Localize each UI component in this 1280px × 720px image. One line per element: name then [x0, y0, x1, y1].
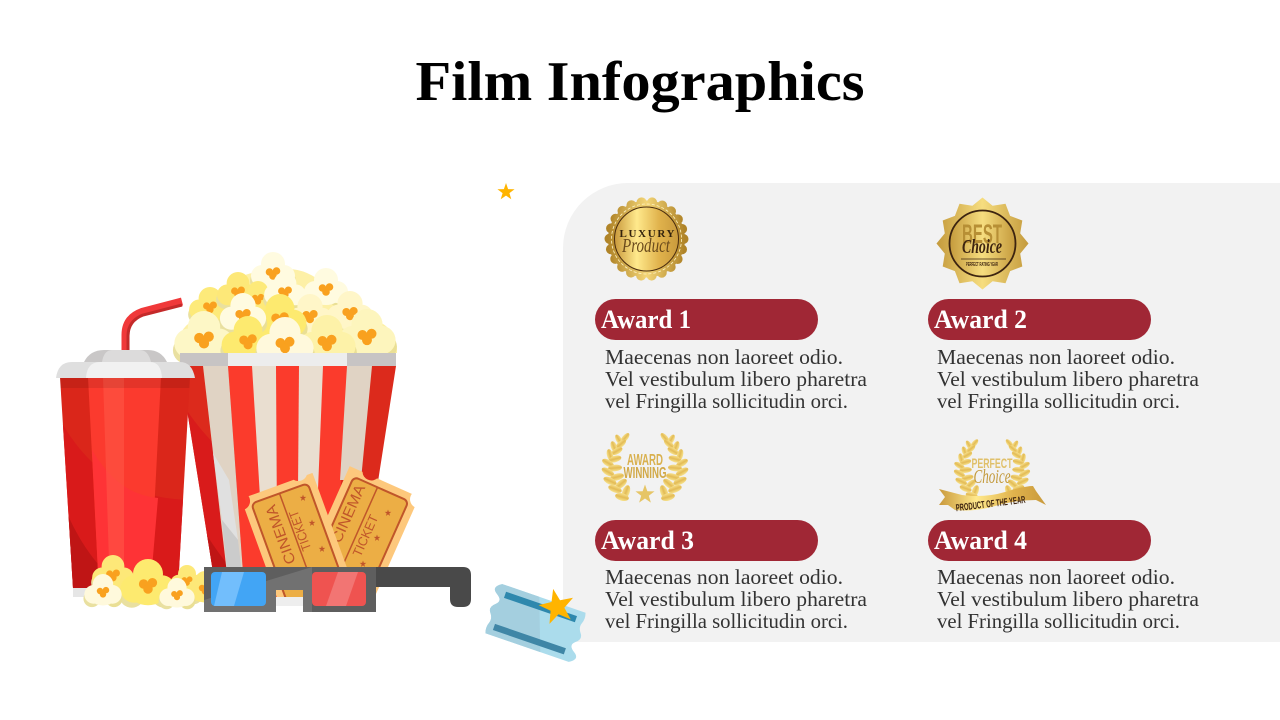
icon: popcorn heap	[173, 252, 397, 368]
icon: cinema ticket right: CINEMA	[328, 482, 369, 546]
award 3 text: Maecenas non laoreet odio.	[605, 565, 843, 589]
award 4 text: Maecenas non laoreet odio.	[937, 565, 1175, 589]
award 1 pill	[595, 299, 818, 340]
icon: cinema ticket right: TICKET	[350, 512, 381, 559]
award 1 text: Maecenas non laoreet odio.	[605, 345, 843, 369]
badge: award winning	[600, 432, 690, 503]
icon: straw	[126, 302, 182, 351]
award 3 text	[605, 565, 868, 633]
award 2 pill	[928, 299, 1151, 340]
panel: awards background	[563, 183, 1280, 642]
award 3 text: Vel vestibulum libero pharetra	[605, 587, 868, 611]
icon: soda cup	[55, 350, 195, 597]
award 4 pill: Award 4	[934, 526, 1027, 555]
icon: 3D glasses	[204, 567, 471, 612]
award 4 text: vel Fringilla sollicitudin orci.	[937, 609, 1180, 633]
icon: cinema ticket left: TICKET	[286, 508, 314, 553]
award 2 text: Vel vestibulum libero pharetra	[937, 367, 1200, 391]
icon: striped popcorn tub	[180, 353, 396, 610]
badge: best choice	[936, 198, 1028, 290]
icon: blue ticket with star	[480, 582, 591, 664]
award 3 pill	[595, 520, 818, 561]
icon: cinema ticket left	[244, 472, 347, 597]
badge: perfect choice	[939, 438, 1046, 514]
badge: best choice: PERFECT RATING YEAR	[966, 262, 998, 268]
icon: spilled popcorn	[83, 555, 225, 609]
illustration: cinema snacks	[55, 252, 471, 621]
award 1 text	[605, 345, 868, 413]
award 2 text: vel Fringilla sollicitudin orci.	[937, 389, 1180, 413]
badge: luxury product	[608, 200, 685, 278]
award 4 text: Vel vestibulum libero pharetra	[937, 587, 1200, 611]
badge: perfect choice: Choice	[974, 466, 1011, 488]
title: Film Infographics	[416, 51, 864, 113]
award 2 text	[937, 345, 1200, 413]
badge: award winning: WINNING	[624, 465, 666, 482]
icon: cinema ticket left: CINEMA	[263, 502, 300, 566]
award 1 text: vel Fringilla sollicitudin orci.	[605, 389, 848, 413]
award 2 pill: Award 2	[934, 305, 1027, 334]
badge: perfect choice: PERFECT	[972, 455, 1013, 471]
award 3 pill: Award 3	[601, 526, 694, 555]
badge: award winning: AWARD	[627, 452, 663, 469]
badge: perfect choice: PRODUCT OF THE YEAR	[955, 495, 1027, 514]
award 3 text: vel Fringilla sollicitudin orci.	[605, 609, 848, 633]
icon: small gold star	[497, 183, 515, 199]
badge: best choice: Choice	[962, 236, 1002, 258]
award 2 text: Maecenas non laoreet odio.	[937, 345, 1175, 369]
award 4 text	[937, 565, 1200, 633]
award 1 text: Vel vestibulum libero pharetra	[605, 367, 868, 391]
badge: luxury product: LUXURY	[620, 228, 675, 240]
badge: luxury product: Product	[621, 235, 670, 257]
icon: cinema ticket right	[328, 466, 415, 594]
badge: best choice: BEST	[962, 219, 1002, 249]
award 1 pill: Award 1	[601, 305, 691, 334]
award 4 pill	[928, 520, 1151, 561]
